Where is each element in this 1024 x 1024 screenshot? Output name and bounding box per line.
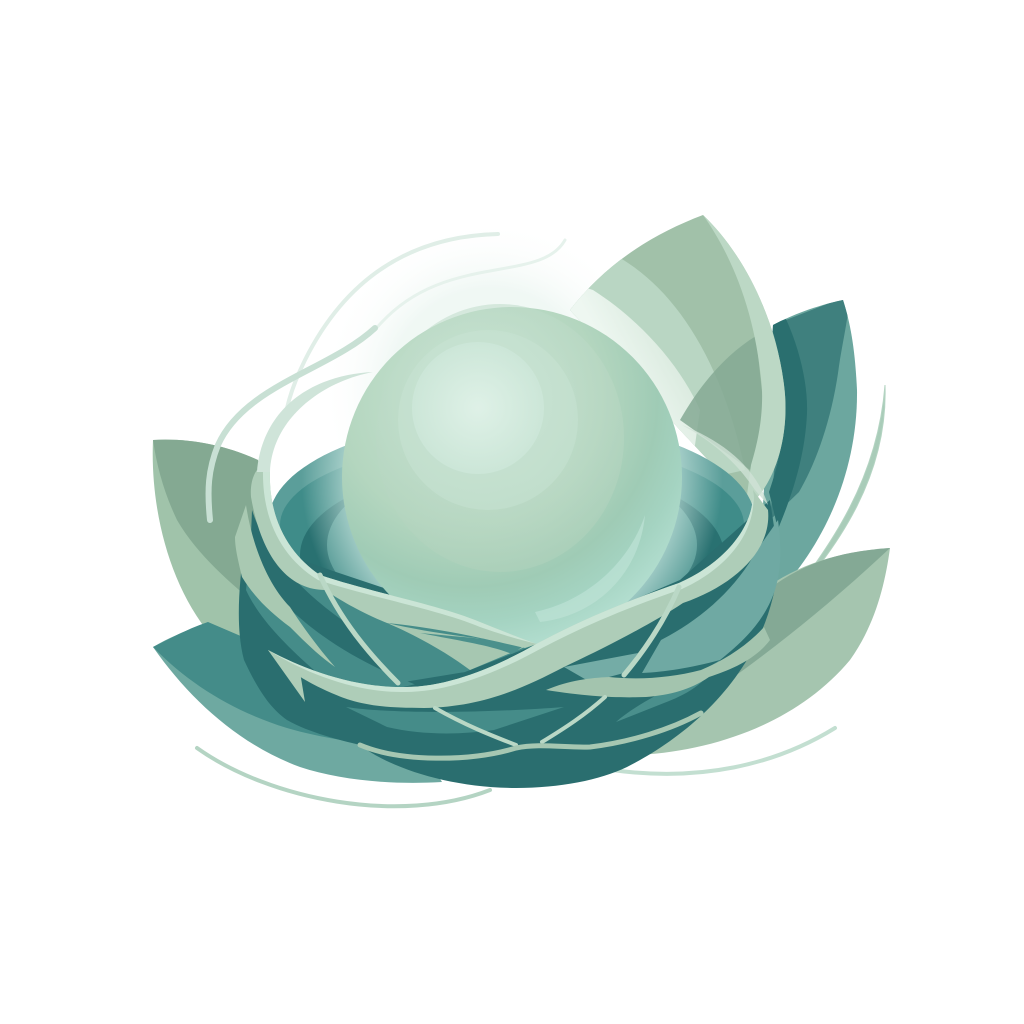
mist over right side of sphere xyxy=(682,425,768,505)
leaf: right teal xyxy=(763,300,858,580)
band: lower mid teal xyxy=(346,707,564,733)
strand: lower right wisp xyxy=(612,728,835,774)
highlight: top left rim edge xyxy=(263,470,537,644)
band: mid teal left xyxy=(246,530,465,700)
ribbon: left outer strap xyxy=(235,505,335,667)
sphere xyxy=(342,304,682,647)
ribbon: inner sage wedge xyxy=(387,623,532,670)
leaf: left upper sage xyxy=(153,440,335,705)
strand: left arc into rim xyxy=(257,372,373,472)
wisps at top left xyxy=(209,234,565,520)
ribbon: top left rim xyxy=(251,470,537,648)
ribbon: main crossing band xyxy=(268,490,768,708)
strand: thin crossing lines xyxy=(320,575,701,758)
band: right light teal xyxy=(642,520,780,673)
glow behind sphere xyxy=(320,220,660,560)
band: dark stripe left xyxy=(250,510,470,690)
highlight: main band edge xyxy=(268,490,753,692)
nest: back interior xyxy=(272,446,752,602)
nest: woven ribbons xyxy=(235,372,780,758)
band: mid teal wedge right xyxy=(616,660,720,722)
strand: lower left wisp xyxy=(197,748,490,806)
leaf: left lower teal xyxy=(153,622,442,783)
ribbon: lower right sage xyxy=(546,627,770,697)
illustration: pearl in a woven nest with leaves xyxy=(152,215,890,808)
band: small light teal xyxy=(564,653,638,682)
band: mid teal under rim xyxy=(327,590,535,683)
band: thin teal sliver xyxy=(420,633,528,654)
nest: bowl xyxy=(239,500,779,788)
leaf: right lower sage xyxy=(640,548,890,755)
ribbon: end wedge xyxy=(268,650,305,702)
leaf: top sage xyxy=(570,215,786,504)
strand: right wisp xyxy=(770,385,885,622)
